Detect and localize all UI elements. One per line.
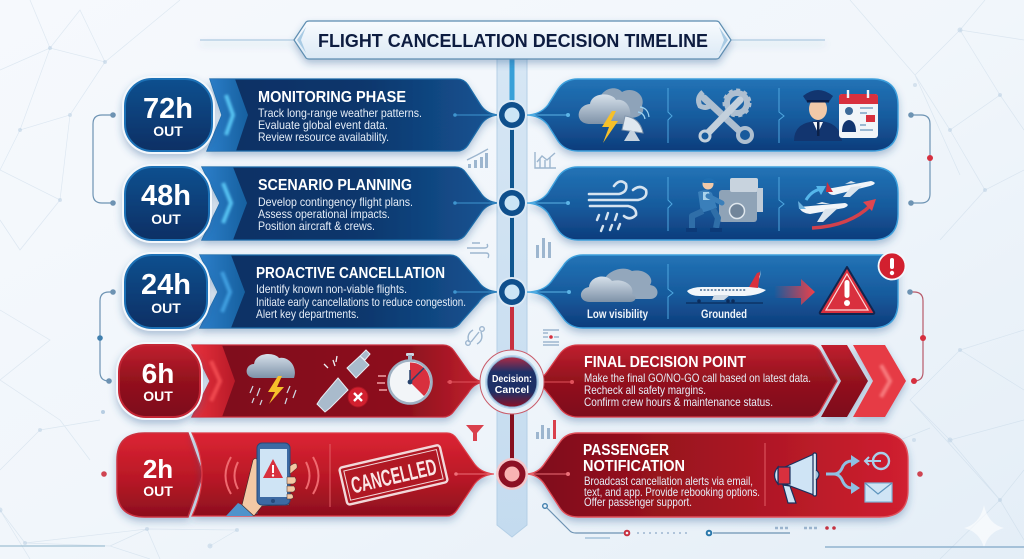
row 2: icon panel xyxy=(526,167,898,240)
row 5: passenger notification panel xyxy=(526,433,908,517)
icon: megaphone with channels xyxy=(774,453,892,503)
row 2: 48h pill: OUT xyxy=(151,211,181,227)
title banner xyxy=(200,21,825,59)
icon: wind and rain xyxy=(589,181,646,231)
heading: PASSENGER xyxy=(583,442,669,459)
icon: thunderstorm xyxy=(247,354,296,405)
stamp: cancelled xyxy=(339,445,448,505)
network pattern: top left xyxy=(0,0,180,250)
icon: warning triangle xyxy=(820,267,874,314)
heading: SCENARIO PLANNING xyxy=(258,177,412,194)
network pattern: top right xyxy=(850,0,1024,240)
icon: repositioning aircraft xyxy=(798,181,876,228)
body text: Evaluate global event data. xyxy=(258,118,388,132)
timeline node: 24h xyxy=(497,277,527,307)
body text: Track long-range weather patterns. xyxy=(258,106,422,120)
body text: Offer passenger support. xyxy=(584,495,692,509)
timeline node: decision cancel xyxy=(480,350,544,414)
label: Grounded xyxy=(701,309,747,321)
row 2: 48h pill xyxy=(122,164,212,243)
row 3: proactive cancellation panel xyxy=(200,255,498,328)
icon: broken connector xyxy=(317,350,370,412)
icon: stopwatch xyxy=(377,353,432,404)
row 1: 72h pill xyxy=(122,76,215,154)
row 1: monitoring phase panel xyxy=(207,79,498,151)
row 4: 6h pill xyxy=(116,342,203,420)
row 1: 72h pill: OUT xyxy=(153,123,183,139)
timeline node: 48h xyxy=(497,188,527,218)
icon: storm cloud and satellite dish xyxy=(579,88,649,143)
body text xyxy=(258,106,422,144)
body text xyxy=(256,282,466,321)
row 4: 6h pill: OUT xyxy=(143,388,173,404)
decorative star xyxy=(964,505,1004,548)
stamp: cancelled: CANCELLED xyxy=(348,453,439,498)
timeline node: decision cancel: Decision: xyxy=(492,373,532,385)
chevron xyxy=(853,345,906,417)
connector brackets xyxy=(0,112,1024,547)
row 5: cancelled notice panel xyxy=(192,433,494,516)
row 3: 24h pill xyxy=(122,252,210,331)
row 3: 24h pill: OUT xyxy=(151,300,181,316)
icon: alert badge xyxy=(878,252,906,280)
icon: mechanic and engine xyxy=(686,178,763,230)
timeline node: 2h xyxy=(496,458,528,490)
body text: Confirm crew hours & maintenance status. xyxy=(584,395,773,409)
label: Low visibility xyxy=(587,309,648,321)
timeline node: decision cancel: Cancel xyxy=(495,384,529,396)
heading: FINAL DECISION POINT xyxy=(584,354,746,371)
body text: Develop contingency flight plans. xyxy=(258,195,413,209)
chevron xyxy=(207,79,248,151)
body text xyxy=(584,474,760,509)
timeline node: 72h xyxy=(497,100,527,130)
timeline spine xyxy=(497,58,527,537)
body text: text, and app. Provide rebooking options. xyxy=(584,485,760,499)
row 1: 72h pill: 72h xyxy=(143,93,193,125)
row 5: 2h pill: OUT xyxy=(143,483,173,499)
row 4: disruption icons panel xyxy=(192,345,484,417)
body text: Recheck all safety margins. xyxy=(584,383,706,397)
row 5: 2h pill xyxy=(117,433,203,517)
body text: Broadcast cancellation alerts via email, xyxy=(584,474,753,488)
arrow xyxy=(774,279,815,305)
heading: PROACTIVE CANCELLATION xyxy=(256,265,445,282)
row 4: 6h pill: 6h xyxy=(142,358,174,389)
row 2: scenario planning panel xyxy=(202,167,498,240)
icon: low visibility clouds xyxy=(581,269,658,302)
body text: Alert key departments. xyxy=(256,307,359,321)
chevron xyxy=(821,345,868,417)
chevron xyxy=(202,167,247,240)
network pattern: bottom left xyxy=(0,310,239,559)
body text: Initiate early cancellations to reduce congestion. xyxy=(256,295,466,309)
icon: growth bars xyxy=(468,153,488,168)
row 5: 2h pill: 2h xyxy=(143,454,173,484)
icon: hand holding phone with alert xyxy=(226,443,318,516)
chevron xyxy=(192,345,235,417)
row 4: final decision panel xyxy=(526,345,906,417)
chevron xyxy=(200,255,245,328)
heading: MONITORING PHASE xyxy=(258,89,406,106)
heading: NOTIFICATION xyxy=(583,458,685,475)
icon: pilot with roster calendar xyxy=(794,90,878,141)
network pattern: bottom right xyxy=(900,330,1024,559)
row 3: icon panel xyxy=(526,252,906,328)
title: FLIGHT CANCELLATION DECISION TIMELINE xyxy=(318,30,708,51)
icon: grounded aircraft xyxy=(686,270,766,303)
row 3: 24h pill: 24h xyxy=(141,269,191,301)
body text: Make the final GO/NO-GO call based on latest data. xyxy=(584,371,811,385)
body text: Review resource availability. xyxy=(258,130,389,144)
body text xyxy=(258,195,413,233)
small decorative icons around spine xyxy=(466,149,559,441)
body text: Identify known non-viable flights. xyxy=(256,282,407,296)
body text xyxy=(584,371,811,409)
row 2: 48h pill: 48h xyxy=(141,180,191,212)
row 1: icon panel xyxy=(526,79,898,151)
body text: Position aircraft & crews. xyxy=(258,219,375,233)
body text: Assess operational impacts. xyxy=(258,207,390,221)
icon: wrench and gear xyxy=(699,90,752,142)
